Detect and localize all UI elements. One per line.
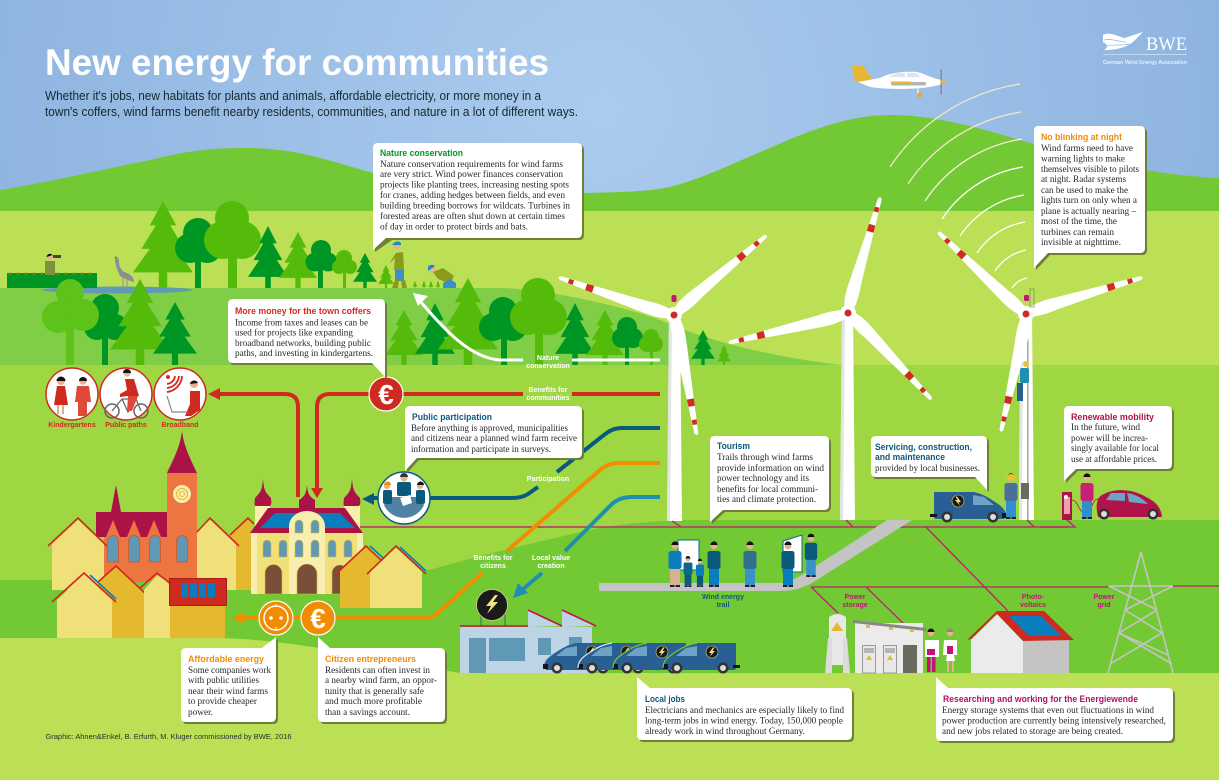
callout: public participation: Before anything is approved, municipalities xyxy=(411,423,568,433)
label: photovoltaics: Photo- xyxy=(1022,594,1045,601)
service van xyxy=(930,492,1007,522)
callout: town coffers xyxy=(228,299,387,379)
intro text: town's coffers, wind farms benefit nearby residents, communities, and nature in a lot of different ways. xyxy=(45,105,578,119)
callout: no blinking: can be used to make the xyxy=(1041,185,1128,195)
benefit line: communities: communities xyxy=(526,395,570,402)
callout: citizen entrepreneurs: Residents can often invest in xyxy=(325,665,431,675)
charging station xyxy=(1062,492,1098,520)
callout: public participation: and citizens near a planned wind farm receive xyxy=(411,433,577,443)
researchers xyxy=(925,629,957,672)
town hall xyxy=(250,479,363,594)
distant green hills xyxy=(0,115,1219,215)
callout: renewable mobility: singly available for local xyxy=(1071,443,1159,453)
callout: public participation: Public participation xyxy=(412,412,492,422)
logo: BWE: BWE xyxy=(1146,34,1187,55)
callout: nature conservation: Nature conservation requirements for wind farms xyxy=(380,159,563,169)
callout: no blinking xyxy=(1034,126,1147,270)
benefit line: local value creation: Local value xyxy=(532,555,570,562)
label: power storage xyxy=(842,594,868,609)
callout: no blinking: at night. Radar systems xyxy=(1041,174,1126,184)
callout: researching: Energy storage systems that even out fluctuations in wind xyxy=(942,705,1155,715)
callout: affordable energy: to provide cheaper xyxy=(188,696,257,706)
icon: red euro xyxy=(369,377,403,411)
label: photovoltaics: voltaics xyxy=(1020,602,1046,609)
label: wind energy trail: Wind energy xyxy=(702,594,744,601)
callout: affordable energy: Affordable energy xyxy=(188,654,264,664)
callout: no blinking: turbines can remain xyxy=(1041,227,1115,237)
callout: nature conservation: projects like planting trees, increasing nesting spots xyxy=(380,180,569,190)
sky background xyxy=(0,0,1219,215)
benefit line: participation: Participation xyxy=(527,476,569,483)
callout: tourism xyxy=(710,436,831,524)
label: public paths: Public paths xyxy=(105,422,147,429)
benefit line: communities: Benefits for xyxy=(529,387,568,394)
callout: town coffers: More money for the town coffers xyxy=(235,306,371,316)
kneeling gardener xyxy=(428,265,456,288)
callout: nature conservation: are very strict. Wind power finances conservation xyxy=(380,169,564,179)
callout: tourism: Trails through wind farms xyxy=(717,452,814,462)
callout: town coffers: paths, and investing in kindergartens. xyxy=(235,348,373,358)
icon: kindergartens xyxy=(46,368,98,420)
red electric car xyxy=(1097,490,1162,520)
icon: orange euro xyxy=(301,601,335,635)
callout: researching: and new jobs related to storage are being created. xyxy=(942,726,1123,736)
benefit line: participation xyxy=(362,428,660,505)
intro text: Whether it's jobs, new habitats for plants and animals, affordable electricity, or more money in a xyxy=(45,89,541,103)
callout: nature conservation: for cranes, adding hedges between fields, and even xyxy=(380,190,565,200)
callout: no blinking: plane is actually nearing – xyxy=(1041,206,1136,216)
label: power storage: Power xyxy=(844,594,866,601)
trail visitors and boards xyxy=(668,534,817,587)
callout: tourism: ties and climate protection. xyxy=(717,494,816,504)
power storage tank xyxy=(825,614,850,673)
callout: town coffers: Income from taxes and leases can be xyxy=(235,318,368,328)
callout: affordable energy: near their wind farms xyxy=(188,686,269,696)
callout: renewable mobility xyxy=(1064,406,1174,483)
callout: citizen entrepreneurs: and much more profitable xyxy=(325,696,422,706)
label: wind energy trail xyxy=(702,594,744,609)
callout: no blinking: most of the time, the xyxy=(1041,216,1117,226)
photovoltaic house xyxy=(967,611,1074,673)
callout: researching: power production are currently being intensively researched, xyxy=(942,716,1166,726)
callout: nature conservation xyxy=(373,143,584,252)
label: kindergartens: Kindergartens xyxy=(48,422,96,429)
icon: public paths xyxy=(100,368,152,420)
power pylon xyxy=(1108,552,1173,673)
logo: BWE: German Wind Energy Association xyxy=(1103,60,1187,66)
benefit line: nature conservation: Nature xyxy=(537,355,559,362)
landscape bands xyxy=(0,211,1219,780)
storage building xyxy=(853,620,926,673)
callout: tourism: power technology and its xyxy=(717,473,809,483)
callout: servicing: provided by local businesses. xyxy=(875,463,980,473)
callout: researching xyxy=(936,677,1175,743)
callout: renewable mobility: power will be increa- xyxy=(1071,433,1148,443)
service worker xyxy=(1004,473,1029,519)
wind energy trail xyxy=(599,520,912,591)
benefit line: nature conservation: conservation xyxy=(526,363,570,370)
climbing technician xyxy=(1017,361,1029,401)
turbine 3 xyxy=(933,228,1144,520)
airplane xyxy=(852,66,945,98)
town: houses right of town hall xyxy=(336,546,426,608)
label: power grid: grid xyxy=(1097,602,1111,609)
callout: affordable energy: with public utilities xyxy=(188,675,260,685)
title: New energy for communities xyxy=(45,42,549,83)
label: broadband: Broadband xyxy=(162,422,198,429)
callout: no blinking: themselves visible to pilots xyxy=(1041,164,1139,174)
callout: servicing: Servicing, construction, xyxy=(875,442,972,452)
label: power grid: Power xyxy=(1093,594,1115,601)
callout: citizen entrepreneurs: than a savings account. xyxy=(325,707,410,717)
turbine 1 xyxy=(556,230,770,521)
callout: affordable energy: Some companies work xyxy=(188,665,272,675)
benefit line: citizens xyxy=(232,463,660,624)
logo: BWE xyxy=(1103,32,1187,66)
person charging car xyxy=(1080,473,1094,519)
callout: tourism: Tourism xyxy=(717,441,750,451)
crane xyxy=(114,256,134,288)
turbine 2 xyxy=(727,195,937,520)
callout: citizen entrepreneurs: a nearby wind farm, an oppor- xyxy=(325,675,437,685)
callout: local jobs: Local jobs xyxy=(645,694,685,704)
callout: nature conservation: of day in order to protect birds and bats. xyxy=(380,222,528,232)
callout: nature conservation: building breeding borrows for wildcats. Turbines in xyxy=(380,200,570,210)
callout: local jobs: Electricians and mechanics are especially likely to find xyxy=(645,705,844,715)
callout: no blinking: lights turn on only when a xyxy=(1041,195,1137,205)
radar arcs xyxy=(890,84,1027,288)
icon: orange euro: € xyxy=(310,603,326,634)
icon: red euro: € xyxy=(378,379,394,410)
label: power storage: storage xyxy=(842,602,868,609)
callout: local jobs: already work in wind throughout Germany. xyxy=(645,726,805,736)
callout: citizen entrepreneurs: Citizen entrepreneurs xyxy=(325,654,416,664)
town: church and houses xyxy=(48,431,254,638)
callout: nature conservation: forested areas are often shut down at certain times xyxy=(380,211,565,221)
benefit line: local value creation xyxy=(513,497,660,598)
icon: public participation people xyxy=(378,472,430,524)
benefit line: local value creation: creation xyxy=(537,563,565,570)
factory building xyxy=(460,610,596,673)
icon: plug socket xyxy=(259,601,293,635)
trees: back row and reeds xyxy=(7,201,440,294)
label: power grid xyxy=(1093,594,1115,609)
trees: centre hill xyxy=(385,278,731,365)
trees: front left row xyxy=(42,279,197,365)
benefit line: citizens: citizens xyxy=(480,563,506,570)
callout: affordable energy xyxy=(181,637,278,724)
callout: public participation xyxy=(405,406,584,473)
callout: tourism: benefits for local communi- xyxy=(717,484,818,494)
graphic credit: Graphic: Ahnen&Enkel, B. Erfurth, M. Kluger commissioned by BWE, 2016 xyxy=(46,734,292,741)
callout: renewable mobility: In the future, wind xyxy=(1071,422,1141,432)
label: wind energy trail: trail xyxy=(717,602,729,609)
electrical grid lines xyxy=(360,520,1219,624)
farmer planting xyxy=(389,241,407,288)
benefit line: citizens: Benefits for xyxy=(474,555,513,562)
callout: no blinking: Wind farms need to have xyxy=(1041,143,1133,153)
callout: no blinking: No blinking at night xyxy=(1041,132,1122,142)
callout: nature conservation: Nature conservation xyxy=(380,148,463,158)
callout: citizen entrepreneurs xyxy=(318,637,447,724)
callout: tourism: provide information on wind xyxy=(717,463,825,473)
benefit line: nature conservation xyxy=(413,293,660,370)
icon: lightning sign xyxy=(476,590,508,620)
callout: renewable mobility: use at affordable prices. xyxy=(1071,454,1157,464)
benefit line: communities xyxy=(208,387,660,498)
callout: servicing: and maintenance xyxy=(875,452,945,462)
callout: town coffers: broadband networks, building public xyxy=(235,338,371,348)
callout: public participation: information and participate in surveys. xyxy=(411,444,551,454)
callout: affordable energy: power. xyxy=(188,707,213,717)
callout: renewable mobility: Renewable mobility xyxy=(1071,412,1154,422)
callout: citizen entrepreneurs: tunity that is generally safe xyxy=(325,686,424,696)
callout: no blinking: invisible at nighttime. xyxy=(1041,237,1121,247)
birdwatcher xyxy=(7,254,97,288)
callout: no blinking: warning lights to make xyxy=(1041,154,1125,164)
callout: researching: Researching and working for the Energiewende xyxy=(943,694,1138,704)
icon: broadband xyxy=(154,368,206,420)
label: photovoltaics xyxy=(1020,594,1046,609)
callout: town coffers: used for projects like expanding xyxy=(235,328,354,338)
callout: servicing xyxy=(871,436,989,492)
fleet of vans xyxy=(543,643,740,674)
callout: local jobs xyxy=(637,677,854,742)
callout: local jobs: long-term jobs in wind energy. Today, 150,000 people xyxy=(645,716,843,726)
intro text xyxy=(45,89,578,119)
